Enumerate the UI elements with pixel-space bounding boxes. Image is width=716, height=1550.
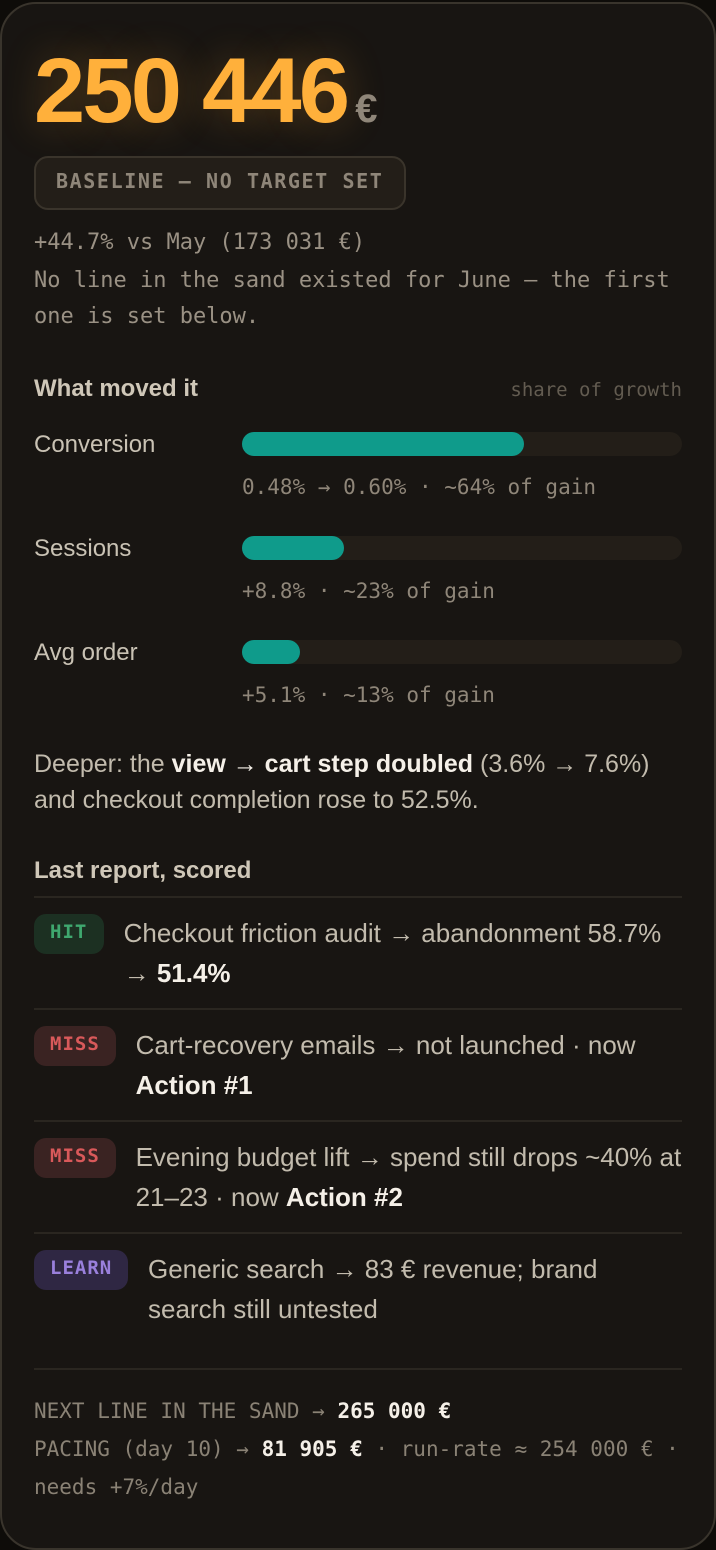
deeper insight text: Deeper: the view → cart step doubled (3.6% → 7.6%) bbox=[34, 750, 650, 778]
footer: next target and pacing: NEXT LINE IN THE SAND → 265 000 € bbox=[34, 1399, 451, 1423]
baseline note: No line in the sand existed for June — the first bbox=[34, 268, 670, 293]
driver: avg order: Avg order bbox=[34, 639, 138, 666]
deeper insight text: and checkout completion rose to 52.5%. bbox=[34, 786, 479, 814]
heading: last report: Last report, scored bbox=[34, 857, 251, 884]
item: miss cart recovery: Action #1 bbox=[136, 1070, 253, 1100]
item: miss cart recovery: MISS bbox=[50, 1033, 100, 1055]
footer: next target and pacing: needs +7%/day bbox=[34, 1475, 198, 1499]
baseline note: one is set below. bbox=[34, 304, 259, 329]
driver: avg order bbox=[34, 639, 682, 707]
driver: conversion bbox=[34, 431, 682, 499]
footer: next target and pacing bbox=[34, 1399, 679, 1499]
item: learn bbox=[34, 1250, 597, 1324]
item: miss cart recovery: Cart-recovery emails → not launched · now bbox=[136, 1030, 636, 1060]
badge: baseline: BASELINE — NO TARGET SET bbox=[56, 169, 383, 193]
heading: what moved it: What moved it bbox=[34, 375, 198, 402]
driver: conversion: Conversion bbox=[34, 431, 155, 458]
driver: sessions bbox=[34, 535, 682, 603]
item: learn: search still untested bbox=[148, 1294, 378, 1324]
total revenue figure: 250 446€ bbox=[34, 40, 378, 142]
comparison text: +44.7% vs May (173 031 €) bbox=[34, 230, 365, 255]
item: miss evening budget bbox=[34, 1138, 682, 1212]
driver: avg order: +5.1% · ~13% of gain bbox=[242, 683, 495, 707]
item: learn: LEARN bbox=[50, 1257, 112, 1279]
item: miss evening budget: MISS bbox=[50, 1145, 100, 1167]
footer: next target and pacing: PACING (day 10) → 81 905 € · run-rate ≈ 254 000 € · bbox=[34, 1437, 679, 1461]
share of growth label: share of growth bbox=[510, 379, 682, 401]
item: miss evening budget: Evening budget lift → spend still drops ~40% at bbox=[136, 1142, 681, 1172]
item: learn: Generic search → 83 € revenue; brand bbox=[148, 1254, 597, 1284]
item: hit: → 51.4% bbox=[124, 958, 231, 988]
badge: baseline bbox=[34, 156, 406, 210]
item: hit bbox=[34, 914, 661, 988]
driver: conversion: 0.48% → 0.60% · ~64% of gain bbox=[242, 475, 596, 499]
driver: sessions: +8.8% · ~23% of gain bbox=[242, 579, 495, 603]
item: hit: Checkout friction audit → abandonment 58.7% bbox=[124, 918, 661, 948]
item: hit: HIT bbox=[50, 921, 87, 943]
baseline note bbox=[34, 268, 670, 329]
driver: sessions: Sessions bbox=[34, 535, 131, 562]
item: miss cart recovery bbox=[34, 1026, 636, 1100]
item: miss evening budget: 21–23 · now Action #2 bbox=[136, 1182, 403, 1212]
deeper insight text bbox=[34, 750, 650, 814]
